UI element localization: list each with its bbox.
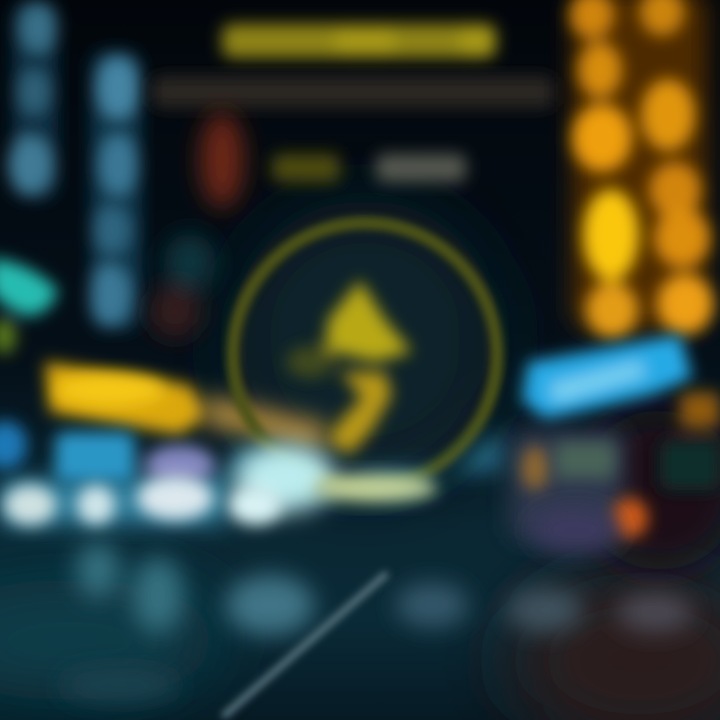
red vertical sign [200, 112, 244, 208]
subtitle bar [152, 76, 554, 108]
coin symbol [286, 280, 412, 455]
small label left [272, 154, 340, 182]
storefront right [510, 430, 648, 552]
second vertical neon sign [90, 50, 142, 330]
central light glow [0, 430, 500, 525]
small label right [376, 154, 466, 182]
white street lights [4, 476, 282, 525]
wet road reflections [60, 542, 693, 701]
yellow neon band [45, 362, 330, 450]
blue signs lower left [0, 421, 215, 485]
dim teal and red signs [149, 234, 216, 338]
road line [225, 575, 385, 715]
left vertical neon sign [8, 0, 58, 200]
coin ring [233, 223, 497, 487]
orange sign far right [660, 392, 720, 490]
blue neon band right [522, 335, 692, 420]
cyan neon sign left [0, 258, 58, 354]
right orange marquee [570, 0, 713, 338]
title bar [222, 24, 496, 58]
